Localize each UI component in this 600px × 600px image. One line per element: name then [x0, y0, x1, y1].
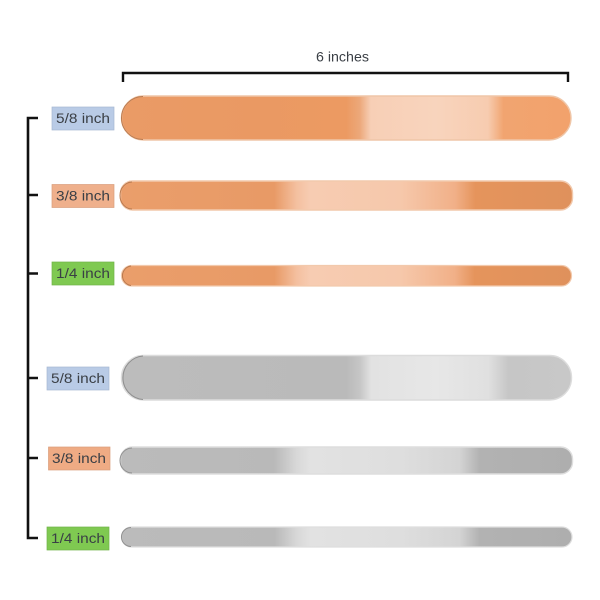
label: copper 3/8 inch: 3/8 inch	[56, 188, 110, 204]
label: copper 5/8 inch	[52, 107, 114, 130]
silver strip 1/4 inch	[122, 527, 572, 547]
label: silver 1/4 inch	[47, 527, 109, 550]
copper strip 3/8 inch	[120, 181, 572, 210]
label: silver 5/8 inch: 5/8 inch	[51, 371, 105, 386]
copper strip 1/4 inch	[122, 266, 572, 286]
length bracket	[123, 73, 568, 82]
label: silver 3/8 inch	[48, 447, 110, 470]
label: silver 5/8 inch	[47, 367, 109, 390]
copper strip 5/8 inch	[122, 96, 571, 140]
silver strip 3/8 inch	[120, 447, 572, 474]
label: silver 1/4 inch: 1/4 inch	[51, 531, 105, 546]
width bracket	[28, 118, 38, 538]
label: copper 3/8 inch	[52, 184, 114, 208]
label: silver 3/8 inch: 3/8 inch	[52, 451, 106, 466]
silver strip 5/8 inch	[122, 356, 572, 400]
dimension label: 6 inches: 6 inches	[316, 50, 369, 64]
label: copper 1/4 inch: 1/4 inch	[56, 266, 110, 281]
label: copper 5/8 inch: 5/8 inch	[56, 111, 110, 126]
label: copper 1/4 inch	[52, 262, 114, 285]
